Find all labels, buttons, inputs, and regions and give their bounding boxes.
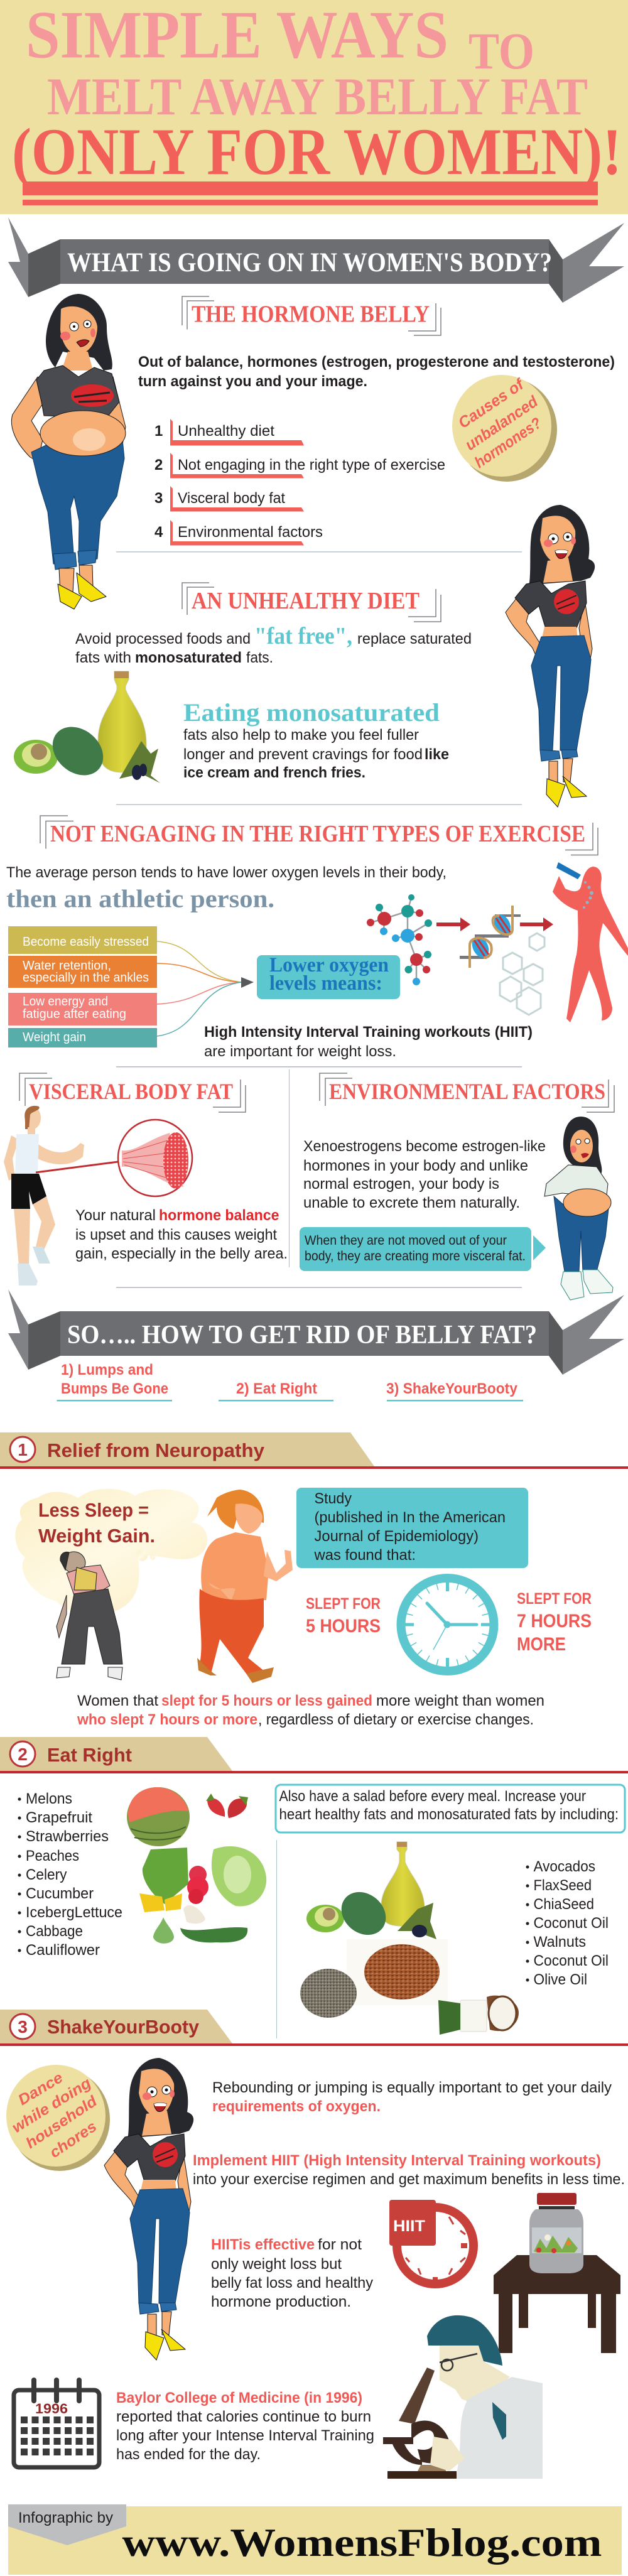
text block: hiit is effective: only weight loss but: [211, 2256, 342, 2273]
label: slept for 7 hours or more: [517, 1590, 592, 1655]
list: healthy fats: Olive Oil: [534, 1971, 587, 1988]
list: four causes: 2: [154, 457, 163, 474]
callout: causes of unbalanced hormones: [452, 375, 557, 482]
callout: dance while doing household chores: while doing: [9, 2074, 94, 2136]
text block: hiit workouts: [204, 1024, 533, 1060]
callout: study: was found that:: [314, 1547, 416, 1564]
section header: relief from neuropathy: Relief from Neuropathy: [47, 1439, 265, 1461]
list: four causes: 4: [154, 524, 163, 541]
callout: causes of unbalanced hormones: unbalanced: [462, 392, 541, 454]
connectors: [157, 941, 241, 1036]
illustration: salad vegetables: [139, 1846, 266, 1944]
text block: eating monosaturated: like: [425, 746, 449, 763]
heading: not engaging in the right types of exercise: [40, 816, 598, 855]
text block: rebounding: [212, 2079, 612, 2115]
thought cloud: less sleep: [15, 1489, 207, 1615]
callout: have a salad: Also have a salad before every meal. Increase your: [279, 1788, 586, 1805]
text block: hiit workouts: High Intensity Interval Training workouts (HIIT): [204, 1024, 533, 1041]
link: shake your booty: 3) ShakeYourBooty: [386, 1380, 518, 1397]
clock: [401, 1578, 494, 1671]
list: four causes: Not engaging in the right type of exercise: [178, 457, 445, 474]
heading: an unhealthy diet: [182, 583, 441, 622]
section header: relief from neuropathy: 1: [18, 1440, 28, 1459]
text block: baylor college: reported that calories continue to burn: [116, 2408, 371, 2425]
text block: avoid processed foods: monosaturated: [135, 649, 242, 666]
box: lower oxygen levels means: levels means:: [269, 972, 382, 995]
text block: out of balance: [138, 354, 615, 390]
illustration: dna: [460, 906, 521, 968]
text block: xenoestrogens: unable to excrete them naturally.: [303, 1194, 520, 1211]
label: slept for 7 hours or more: 7 HOURS: [517, 1611, 592, 1632]
text block: average person: The average person tends to have lower oxygen levels in their body,: [6, 864, 447, 881]
illustration: table with jar: [494, 2193, 620, 2353]
banner: how to get rid of belly fat: SO….. HOW TO GET RID OF BELLY FAT?: [67, 1321, 537, 1350]
callout: dance while doing household chores: household: [23, 2092, 101, 2152]
label: slept for 5 hours: 5 HOURS: [306, 1616, 381, 1637]
icon: hiit stopwatch: [389, 2200, 474, 2286]
text block: hiit is effective: belly fat loss and healthy: [211, 2275, 373, 2292]
text block: xenoestrogens: [303, 1138, 546, 1211]
emphasis: fat free: "fat free",: [254, 623, 352, 649]
text block: hiit is effective: HIITis effective: [211, 2236, 315, 2253]
list: foods: Cauliflower: [26, 1942, 100, 1959]
link: lumps and bumps: 1) Lumps and: [61, 1361, 153, 1378]
text block: hormone balance: gain, especially in the belly area.: [75, 1245, 288, 1262]
heading: the hormone belly: THE HORMONE BELLY: [192, 301, 430, 328]
callout: causes of unbalanced hormones: hormones?: [472, 414, 544, 472]
thought cloud: less sleep: Weight Gain.: [38, 1525, 155, 1547]
illustration: scientist with microscope: [383, 2315, 543, 2479]
box: low energy: [8, 993, 157, 1026]
callout: study: Journal of Epidemiology): [314, 1528, 479, 1545]
text block: avoid processed foods: replace saturated: [357, 630, 472, 647]
text block: women that slept: more weight than women: [376, 1692, 544, 1709]
section header: shake your booty: 3: [18, 2017, 28, 2037]
text block: xenoestrogens: Xenoestrogens become estrogen-like: [303, 1138, 546, 1155]
text block: implement hiit: [193, 2152, 625, 2188]
text block: baylor college: has ended for the day.: [116, 2446, 261, 2463]
text block: xenoestrogens: hormones in your body and unlike: [303, 1157, 528, 1174]
text block: eating monosaturated: fats also help to make you feel fuller: [183, 727, 419, 744]
link: eat right: 2) Eat Right: [236, 1380, 317, 1397]
illustration: molecule: [367, 894, 432, 985]
website: www.WomensFblog.com: [122, 2520, 602, 2565]
text block: women that slept: Women that: [77, 1692, 158, 1709]
section header: shake your booty: ShakeYourBooty: [47, 2016, 200, 2038]
text block: implement hiit: Implement HIIT (High Intensity Interval Training workouts): [193, 2152, 601, 2169]
text block: avoid processed foods: fats with: [75, 649, 131, 666]
title line one: SIMPLE WAYS: [26, 0, 448, 73]
text block: hormone balance: Your natural: [75, 1207, 156, 1224]
list: healthy fats: Avocados: [534, 1858, 595, 1875]
text block: average person: then an athletic person.: [6, 884, 274, 913]
list: foods: Strawberries: [26, 1828, 109, 1845]
list: healthy fats: ChiaSeed: [534, 1896, 594, 1913]
text block: eating monosaturated: Eating monosaturated: [183, 698, 440, 727]
text block: hormone balance: is upset and this causes weight: [75, 1226, 277, 1243]
list: foods: Melons: [26, 1790, 72, 1807]
list: four causes: Environmental factors: [178, 524, 323, 541]
icon: hiit stopwatch: HIIT: [393, 2217, 425, 2235]
text block: baylor college: long after your Intense Interval Training: [116, 2427, 374, 2444]
list: healthy fats: Coconut Oil: [534, 1952, 609, 1969]
label: slept for 5 hours: [306, 1595, 381, 1637]
tag: infographic by: Infographic by: [18, 2509, 113, 2526]
section header: relief from neuropathy: [0, 1432, 628, 1469]
banner: how to get rid of belly fat: [8, 1289, 624, 1375]
list: foods: Cabbage: [26, 1923, 83, 1940]
heading: visceral body fat: VISCERAL BODY FAT: [29, 1079, 233, 1104]
illustration: strawberries: [206, 1794, 248, 1818]
text block: eating monosaturated: ice cream and french fries.: [183, 764, 365, 781]
box: lower oxygen levels means: Lower oxygen: [269, 954, 389, 977]
tag: infographic by: [8, 2504, 126, 2545]
list: healthy fats: [526, 1858, 609, 1988]
list: foods: [18, 1790, 122, 1959]
list: healthy fats: FlaxSeed: [534, 1877, 592, 1894]
heading: visceral body fat: [19, 1073, 246, 1112]
list bracket markers: [170, 419, 304, 545]
illustration: muscle magnifier: [36, 1120, 192, 1196]
text block: hiit is effective: for not: [318, 2236, 362, 2253]
section header: eat right: 2: [18, 1745, 28, 1764]
text block: women that slept: [77, 1692, 544, 1728]
text block: out of balance: turn against you and your image.: [138, 373, 367, 390]
text block: rebounding: requirements of oxygen.: [212, 2098, 381, 2115]
illustration: happy woman: [506, 505, 595, 807]
list: four causes: 3: [154, 490, 163, 507]
illustration: exercising woman: [4, 1106, 84, 1285]
list: foods: Grapefruit: [26, 1809, 92, 1826]
box: water retention: [8, 956, 157, 988]
label: slept for 5 hours: SLEPT FOR: [306, 1595, 381, 1613]
text block: hiit is effective: hormone production.: [211, 2293, 351, 2310]
title underline bars: [23, 181, 598, 205]
illustration: sleeping woman: [57, 1549, 122, 1680]
text block: hormone balance: hormone balance: [159, 1207, 279, 1224]
illustration: jogging woman: [197, 1490, 293, 1683]
callout: study: (published in In the American: [314, 1509, 506, 1526]
illustration: happy woman dancing: [104, 2058, 193, 2360]
box: weight gain: [8, 1028, 157, 1047]
text block: baylor college: [116, 2389, 374, 2463]
banner: what is going on: WHAT IS GOING ON IN WOMEN'S BODY?: [67, 248, 552, 278]
box: low energy: Low energy and: [23, 995, 108, 1009]
callout: not moved out of body: When they are not moved out of your: [305, 1233, 507, 1248]
label: slept for 7 hours or more: MORE: [517, 1634, 566, 1655]
title word TO: TO: [468, 22, 534, 80]
callout: dance while doing household chores: chores: [46, 2118, 100, 2162]
section header: shake your booty: [0, 2010, 628, 2046]
illustration: hexagons: [500, 933, 544, 1015]
box: easily stressed: Become easily stressed: [23, 935, 149, 949]
box: water retention: Water retention,: [23, 959, 111, 973]
text block: women that slept: who slept 7 hours or more: [77, 1711, 257, 1728]
text block: women that slept: , regardless of dietary or exercise changes.: [258, 1711, 534, 1728]
text block: eating monosaturated: longer and prevent cravings for food: [183, 746, 423, 763]
link: lumps and bumps: [57, 1361, 172, 1402]
text block: avoid processed foods: [75, 623, 472, 666]
text block: hiit workouts: are important for weight loss.: [204, 1043, 396, 1060]
arrow: [241, 977, 254, 988]
list: foods: Cucumber: [26, 1885, 94, 1902]
heading: environmental factors: [320, 1073, 614, 1112]
text block: avoid processed foods: fats.: [246, 649, 273, 666]
list: four causes: Visceral body fat: [178, 490, 285, 507]
text block: women that slept: slept for 5 hours or less gained: [161, 1692, 372, 1709]
text block: eating monosaturated: [183, 698, 449, 781]
flow chart: symptoms of low oxygen: [8, 926, 400, 1047]
box: lower oxygen levels means: [257, 954, 400, 999]
list: four causes: Unhealthy diet: [178, 423, 274, 440]
callout: study: [296, 1488, 528, 1568]
list: healthy fats: Coconut Oil: [534, 1915, 609, 1932]
arrow: dna to person: [520, 917, 553, 931]
heading: an unhealthy diet: AN UNHEALTHY DIET: [192, 588, 420, 614]
footer panel: [8, 2504, 622, 2575]
list: healthy fats: Walnuts: [534, 1934, 586, 1951]
text block: hiit is effective: [211, 2236, 373, 2310]
list: foods: IcebergLettuce: [26, 1904, 122, 1921]
illustration: oil, avocado, seeds, coconut: [300, 1842, 519, 2035]
thought cloud: less sleep: Less Sleep =: [38, 1499, 149, 1521]
text block: xenoestrogens: normal estrogen, your body is: [303, 1176, 499, 1193]
box: low energy: fatigue after eating: [23, 1007, 126, 1021]
label: slept for 7 hours or more: SLEPT FOR: [517, 1590, 592, 1608]
text block: baylor college: Baylor College of Medicine (in 1996): [116, 2389, 362, 2406]
header background panel: [0, 0, 628, 214]
callout: not moved out of body: [300, 1227, 546, 1271]
callout: dance while doing household chores: [6, 2065, 110, 2171]
box: weight gain: Weight gain: [23, 1031, 86, 1044]
icon: calendar 1996: 1996: [35, 2401, 68, 2416]
box: easily stressed: [8, 926, 157, 954]
illustration: avocado and olive oil: [14, 671, 160, 785]
callout: not moved out of body: body, they are creating more visceral fat.: [305, 1249, 526, 1264]
callout: causes of unbalanced hormones: Causes of: [455, 375, 528, 432]
illustration: silhouette drinking: [553, 862, 628, 1022]
section header: eat right: [0, 1737, 628, 1773]
banner: what is going on: [8, 217, 624, 303]
text block: hormone balance: [75, 1207, 288, 1262]
callout: study: Study: [314, 1490, 352, 1507]
link: lumps and bumps: Bumps Be Gone: [61, 1380, 168, 1397]
section header: eat right: Eat Right: [47, 1744, 132, 1766]
illustration: watermelon: [127, 1787, 190, 1846]
text block: out of balance: Out of balance, hormones (estrogen, progesterone and testosterone): [138, 354, 615, 371]
illustration: unhappy woman with belly: [11, 294, 126, 609]
icon: calendar 1996: [14, 2380, 99, 2467]
arrow: molecule to dna: [436, 917, 470, 931]
list: foods: Peaches: [26, 1848, 79, 1864]
box: water retention: especially in the ankles: [23, 971, 149, 985]
callout: have a salad: [276, 1785, 625, 1832]
list: four causes: 1: [154, 423, 163, 440]
text block: avoid processed foods: Avoid processed foods and: [75, 630, 251, 647]
text block: rebounding: Rebounding or jumping is equally important to get your daily: [212, 2079, 612, 2096]
heading: the hormone belly: [182, 296, 441, 335]
list: foods: Celery: [26, 1866, 67, 1883]
text block: implement hiit: into your exercise regimen and get maximum benefits in less time.: [193, 2171, 625, 2188]
list: four causes: [154, 419, 445, 545]
illustration: small unhappy woman: [544, 1117, 613, 1300]
text block: average person: [6, 864, 447, 913]
callout: dance while doing household chores: Dance: [15, 2069, 66, 2109]
